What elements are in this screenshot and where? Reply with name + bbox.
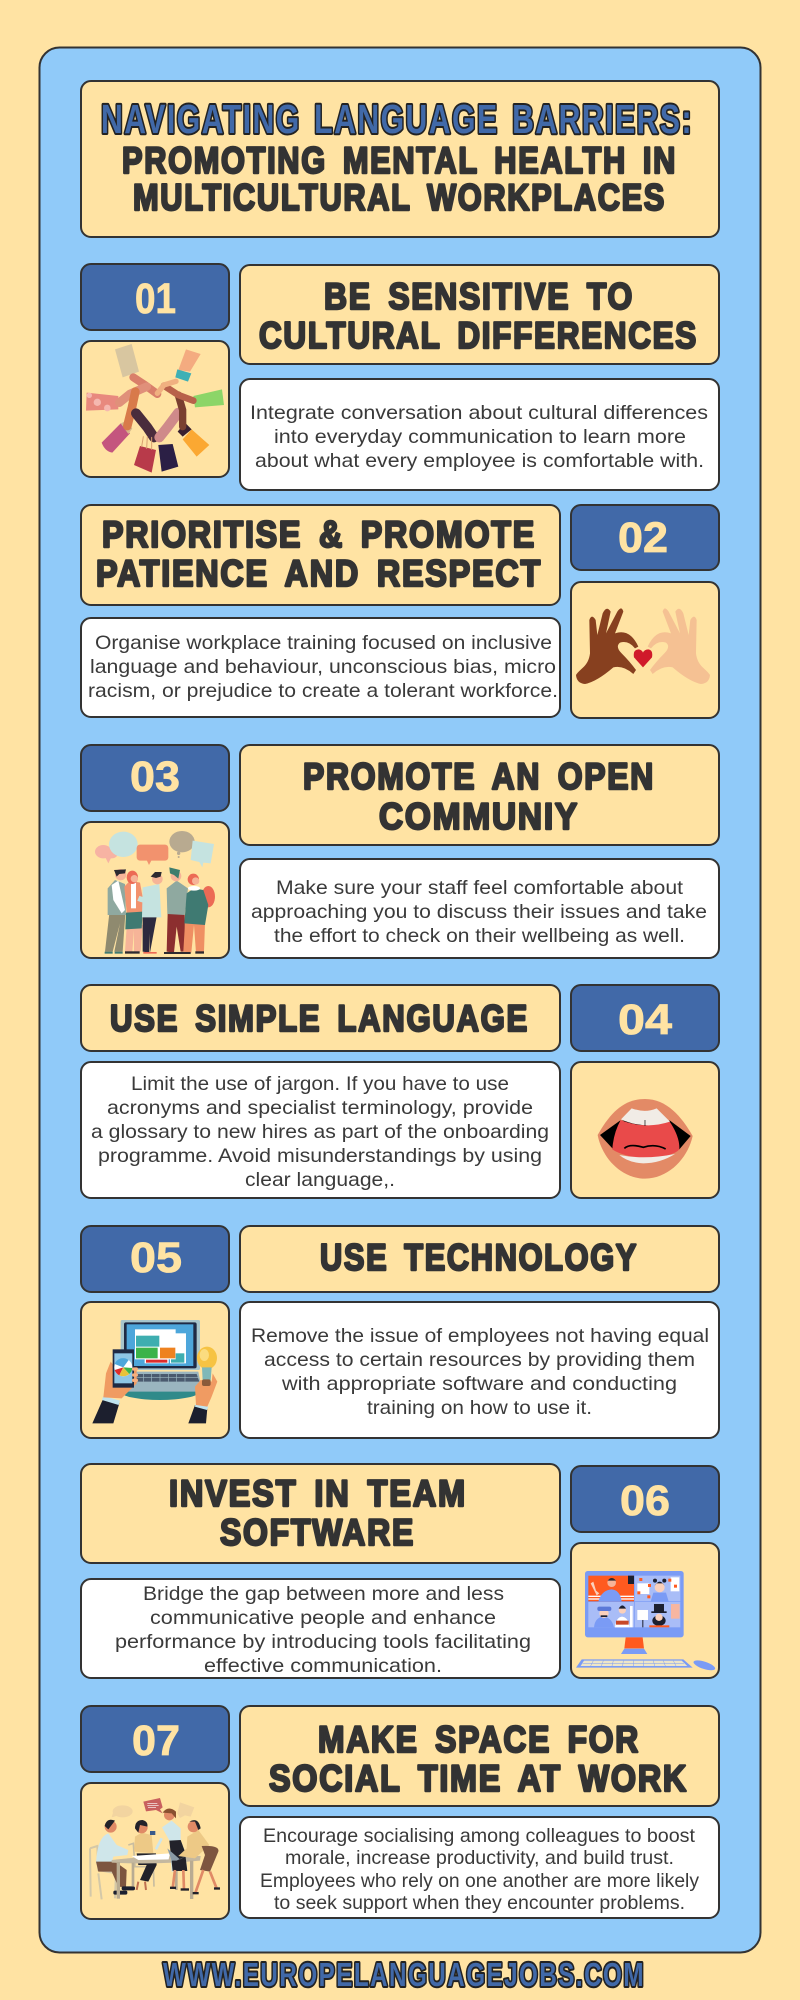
number badge 07 bbox=[81, 1706, 229, 1772]
step heading bbox=[240, 1226, 719, 1292]
number badge 06: 06 bbox=[620, 1477, 670, 1525]
step heading: COMMUNIY bbox=[379, 796, 579, 837]
step heading: BE SENSITIVE TO bbox=[324, 276, 634, 317]
step text: Encourage socialising among colleagues to boost bbox=[263, 1825, 696, 1847]
image tile: video call on a desktop computer bbox=[571, 1543, 719, 1678]
title line 3: MULTICULTURAL WORKPLACES bbox=[133, 177, 666, 218]
step heading: MAKE SPACE FOR bbox=[318, 1719, 640, 1760]
step heading bbox=[240, 745, 719, 845]
step heading: CULTURAL DIFFERENCES bbox=[259, 315, 698, 356]
step text: performance by introducing tools facilitating bbox=[115, 1631, 531, 1653]
step heading bbox=[240, 265, 719, 364]
step 04 bbox=[81, 985, 719, 1198]
image tile: two hands and a heart bbox=[571, 582, 719, 718]
image tile: colleagues around a table bbox=[81, 1783, 229, 1919]
step text: to seek support when they encounter problems. bbox=[274, 1892, 685, 1914]
step 01 bbox=[81, 264, 719, 490]
step text: acronyms and specialist terminology, provide bbox=[107, 1097, 533, 1119]
step text bbox=[240, 859, 719, 958]
step text: language and behaviour, unconscious bias, micro bbox=[90, 656, 556, 678]
step text: Make sure your staff feel comfortable about bbox=[276, 877, 684, 899]
step heading bbox=[240, 1706, 719, 1806]
step text: Limit the use of jargon. If you have to use bbox=[131, 1073, 509, 1095]
number badge 05: 05 bbox=[130, 1234, 182, 1282]
step text: Employees who rely on one another are more likely bbox=[260, 1870, 699, 1892]
step heading bbox=[81, 1464, 560, 1563]
step 05 bbox=[81, 1226, 719, 1438]
step heading: PROMOTE AN OPEN bbox=[303, 756, 655, 797]
step 02 bbox=[81, 505, 719, 718]
step heading: PATIENCE AND RESPECT bbox=[96, 553, 542, 594]
step text: access to certain resources by providing them bbox=[264, 1349, 695, 1371]
step text: morale, increase productivity, and build trust. bbox=[285, 1847, 674, 1869]
step 06 bbox=[81, 1464, 719, 1678]
step text: into everyday communication to learn more bbox=[274, 426, 686, 448]
step text: Organise workplace training focused on inclusive bbox=[95, 632, 552, 654]
step text: approaching you to discuss their issues and take bbox=[251, 901, 707, 923]
step text bbox=[240, 1302, 719, 1438]
step heading: SOCIAL TIME AT WORK bbox=[269, 1758, 688, 1799]
step text bbox=[81, 1579, 560, 1678]
step text: about what every employee is comfortable with. bbox=[255, 450, 704, 472]
step text: clear language,. bbox=[245, 1169, 395, 1191]
step text: racism, or prejudice to create a tolerant workforce. bbox=[88, 680, 558, 702]
step text: Remove the issue of employees not having equal bbox=[251, 1325, 709, 1347]
number badge 04: 04 bbox=[618, 996, 672, 1044]
number badge 03: 03 bbox=[130, 753, 180, 801]
step text: Integrate conversation about cultural differences bbox=[250, 402, 708, 424]
title line 2: PROMOTING MENTAL HEALTH IN bbox=[122, 140, 677, 181]
number badge 01: 01 bbox=[135, 275, 176, 323]
step text: a glossary to new hires as part of the onboarding bbox=[91, 1121, 549, 1143]
number badge 02: 02 bbox=[618, 514, 668, 562]
step text bbox=[81, 1062, 560, 1198]
step text: Bridge the gap between more and less bbox=[143, 1583, 504, 1605]
step heading: USE SIMPLE LANGUAGE bbox=[110, 998, 529, 1039]
number badge 05 bbox=[81, 1226, 229, 1292]
number badge 07: 07 bbox=[132, 1717, 180, 1765]
image tile: hands forming a heart bbox=[81, 341, 229, 477]
step heading: USE TECHNOLOGY bbox=[320, 1237, 638, 1278]
image tile: open mouth bbox=[571, 1062, 719, 1198]
step 07 bbox=[81, 1706, 719, 1919]
step text bbox=[240, 1817, 719, 1918]
number badge 06 bbox=[571, 1466, 719, 1532]
image tile: laptop, phone and light bulb bbox=[81, 1302, 229, 1438]
number badge 04 bbox=[571, 985, 719, 1051]
step text: effective communication. bbox=[204, 1655, 442, 1677]
step text bbox=[240, 379, 719, 490]
number badge 01 bbox=[81, 264, 229, 330]
step heading: SOFTWARE bbox=[220, 1512, 415, 1553]
step heading: INVEST IN TEAM bbox=[169, 1473, 467, 1514]
step text: with appropriate software and conducting bbox=[281, 1373, 677, 1395]
step text: programme. Avoid misunderstandings by using bbox=[98, 1145, 542, 1167]
step text bbox=[81, 618, 560, 717]
step 03 bbox=[81, 745, 719, 958]
step text: training on how to use it. bbox=[367, 1397, 592, 1419]
step text: the effort to check on their wellbeing as well. bbox=[274, 925, 685, 947]
image tile: group talking with speech bubbles bbox=[81, 822, 229, 958]
number badge 02 bbox=[571, 505, 719, 570]
step heading bbox=[81, 985, 560, 1051]
title block bbox=[81, 81, 719, 237]
step text: communicative people and enhance bbox=[150, 1607, 496, 1629]
number badge 03 bbox=[81, 745, 229, 811]
step heading: PRIORITISE & PROMOTE bbox=[102, 514, 536, 555]
step heading bbox=[81, 505, 560, 605]
